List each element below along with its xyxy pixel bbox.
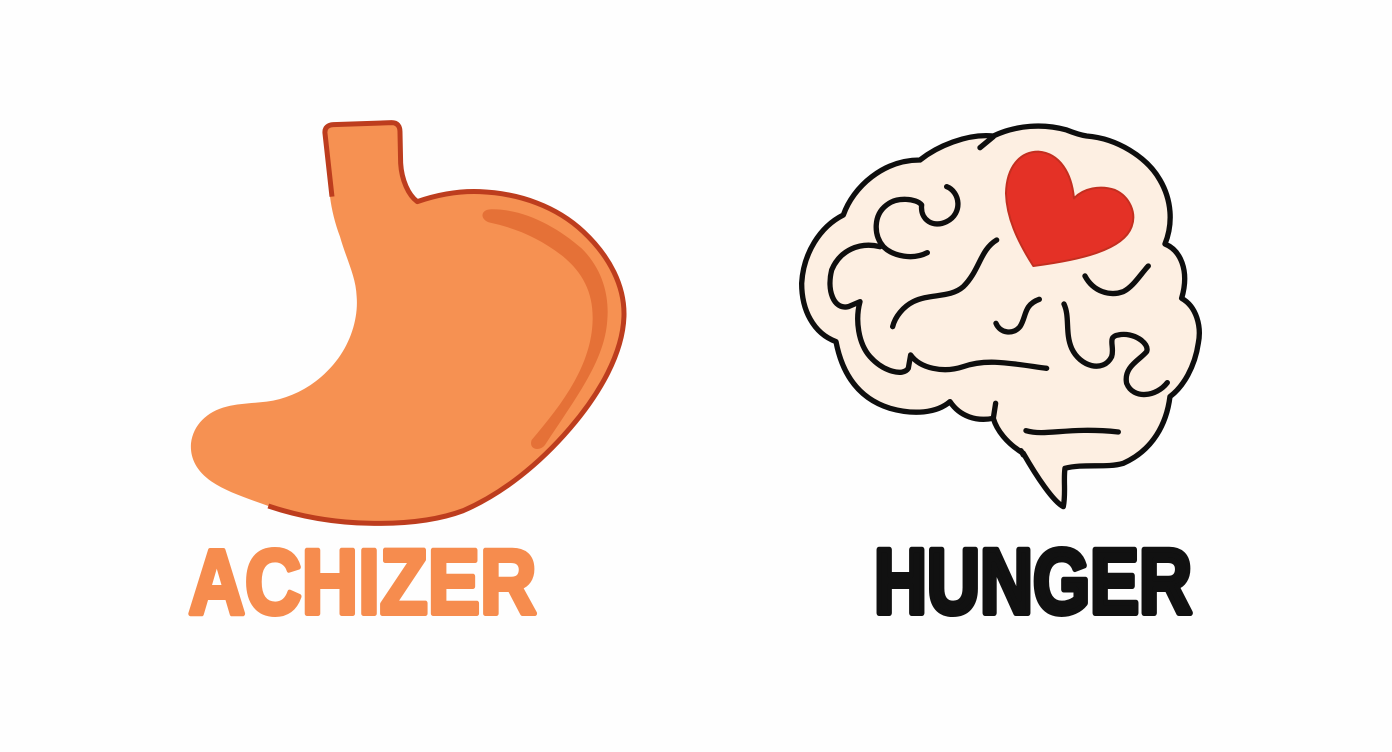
stomach outline [268,123,624,523]
heart [1006,152,1133,266]
label: ACHIZER: ACHIZER [188,532,536,634]
icon: brain with heart [802,126,1199,507]
icon: stomach [191,122,624,523]
label: HUNGER: HUNGER [874,531,1192,633]
brain folds [830,137,1167,455]
stomach inner highlight [482,209,608,449]
stomach body [191,122,624,523]
brain outline [802,126,1199,507]
